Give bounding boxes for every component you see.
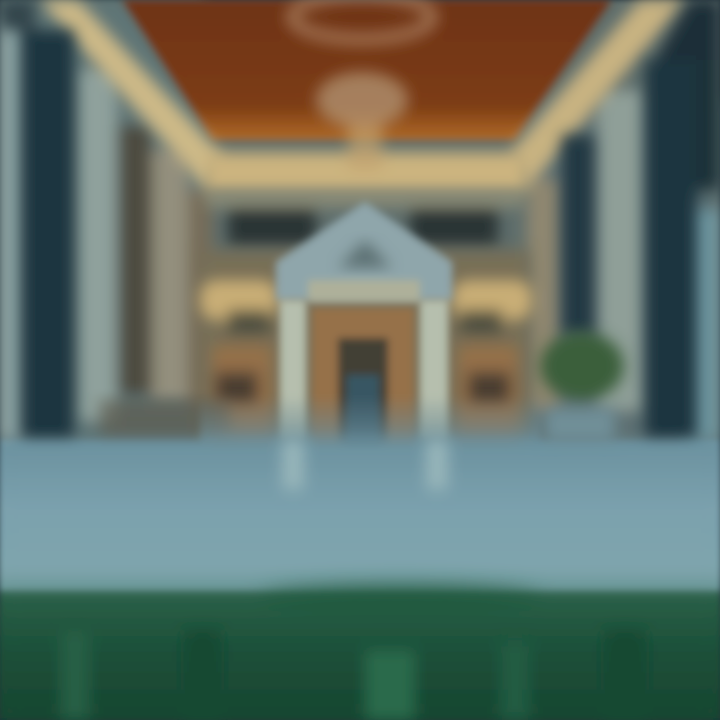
chandelier (292, 0, 432, 170)
right side wall (527, 90, 720, 440)
dark base shadow (100, 400, 230, 438)
ceiling (122, 0, 612, 140)
dark columns right (562, 0, 720, 440)
ceiling beam left (40, 0, 222, 188)
floor (0, 442, 720, 590)
pediment inner (338, 240, 392, 268)
background wall (0, 0, 720, 440)
upper windows (205, 192, 525, 246)
left side wall (0, 0, 212, 440)
portal pillars (280, 300, 448, 440)
portal base fade (200, 395, 540, 445)
pillar reflections (282, 408, 615, 490)
floor base (0, 440, 720, 590)
grass streaks (60, 630, 645, 720)
side bays right (452, 280, 532, 440)
ceiling beam right (512, 0, 685, 188)
lower wall band (200, 250, 530, 440)
side bays left (200, 280, 278, 440)
cross beam (205, 152, 527, 192)
plant (540, 332, 624, 400)
dark columns left (0, 0, 74, 440)
central portal (308, 280, 420, 445)
grass (0, 586, 720, 720)
pediment (276, 202, 452, 300)
grass base (0, 590, 720, 720)
